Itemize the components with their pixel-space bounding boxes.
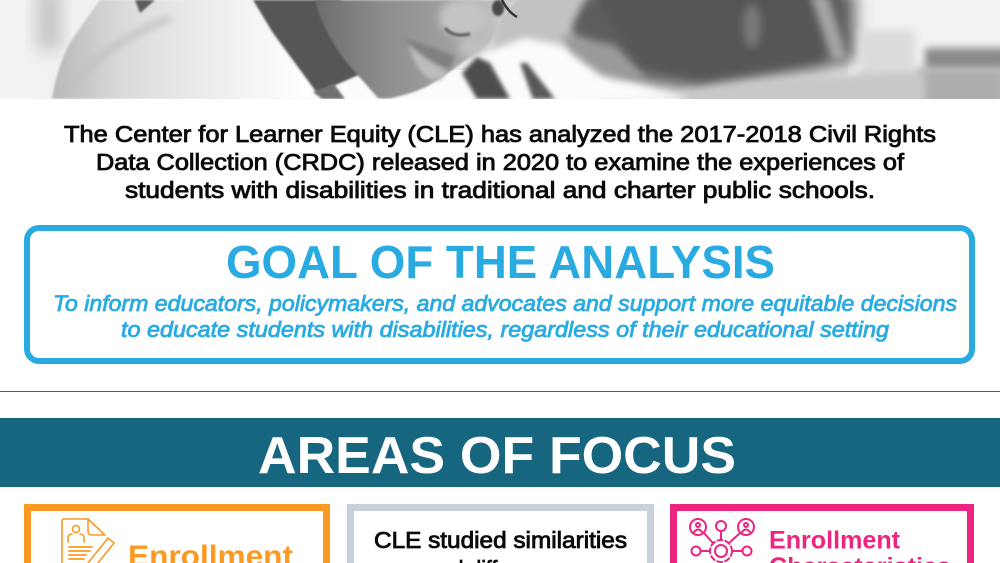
enrollment characteristics label xyxy=(769,526,951,563)
goal heading: GOAL OF THE ANALYSIS xyxy=(226,236,775,288)
intro paragraph: Data Collection (CRDC) released in 2020 to examine the experiences of xyxy=(96,149,905,175)
goal description: to educate students with disabilities, regardless of their educational setting xyxy=(121,317,889,342)
panel: goal of the analysis xyxy=(27,228,972,361)
panel: enrollment xyxy=(28,508,326,563)
goal panel border xyxy=(27,228,972,361)
panel text: CLE studied similarities xyxy=(374,527,627,553)
neck shadow xyxy=(253,0,370,93)
panel text xyxy=(374,527,627,563)
intro paragraph: students with disabilities in traditional and charter public schools. xyxy=(125,177,875,203)
photo: student writing at a desk xyxy=(0,0,1000,110)
icon: network around a gear xyxy=(690,519,754,562)
banner heading: AREAS OF FOCUS xyxy=(258,427,736,485)
intro paragraph xyxy=(64,121,936,203)
panel: enrollment characteristics xyxy=(674,508,970,563)
enrollment characteristics label: Enrollment xyxy=(769,526,901,554)
icon: enrollment form and pencil xyxy=(62,519,114,563)
goal description xyxy=(53,291,957,342)
intro paragraph: The Center for Learner Equity (CLE) has analyzed the 2017-2018 Civil Rights xyxy=(64,121,936,147)
arm and dark strips xyxy=(476,34,684,99)
banner: areas of focus xyxy=(0,418,1000,487)
panel: similarities and differences xyxy=(350,508,650,563)
goal description: To inform educators, policymakers, and advocates and support more equitable decisions xyxy=(53,291,957,316)
face xyxy=(315,0,517,99)
